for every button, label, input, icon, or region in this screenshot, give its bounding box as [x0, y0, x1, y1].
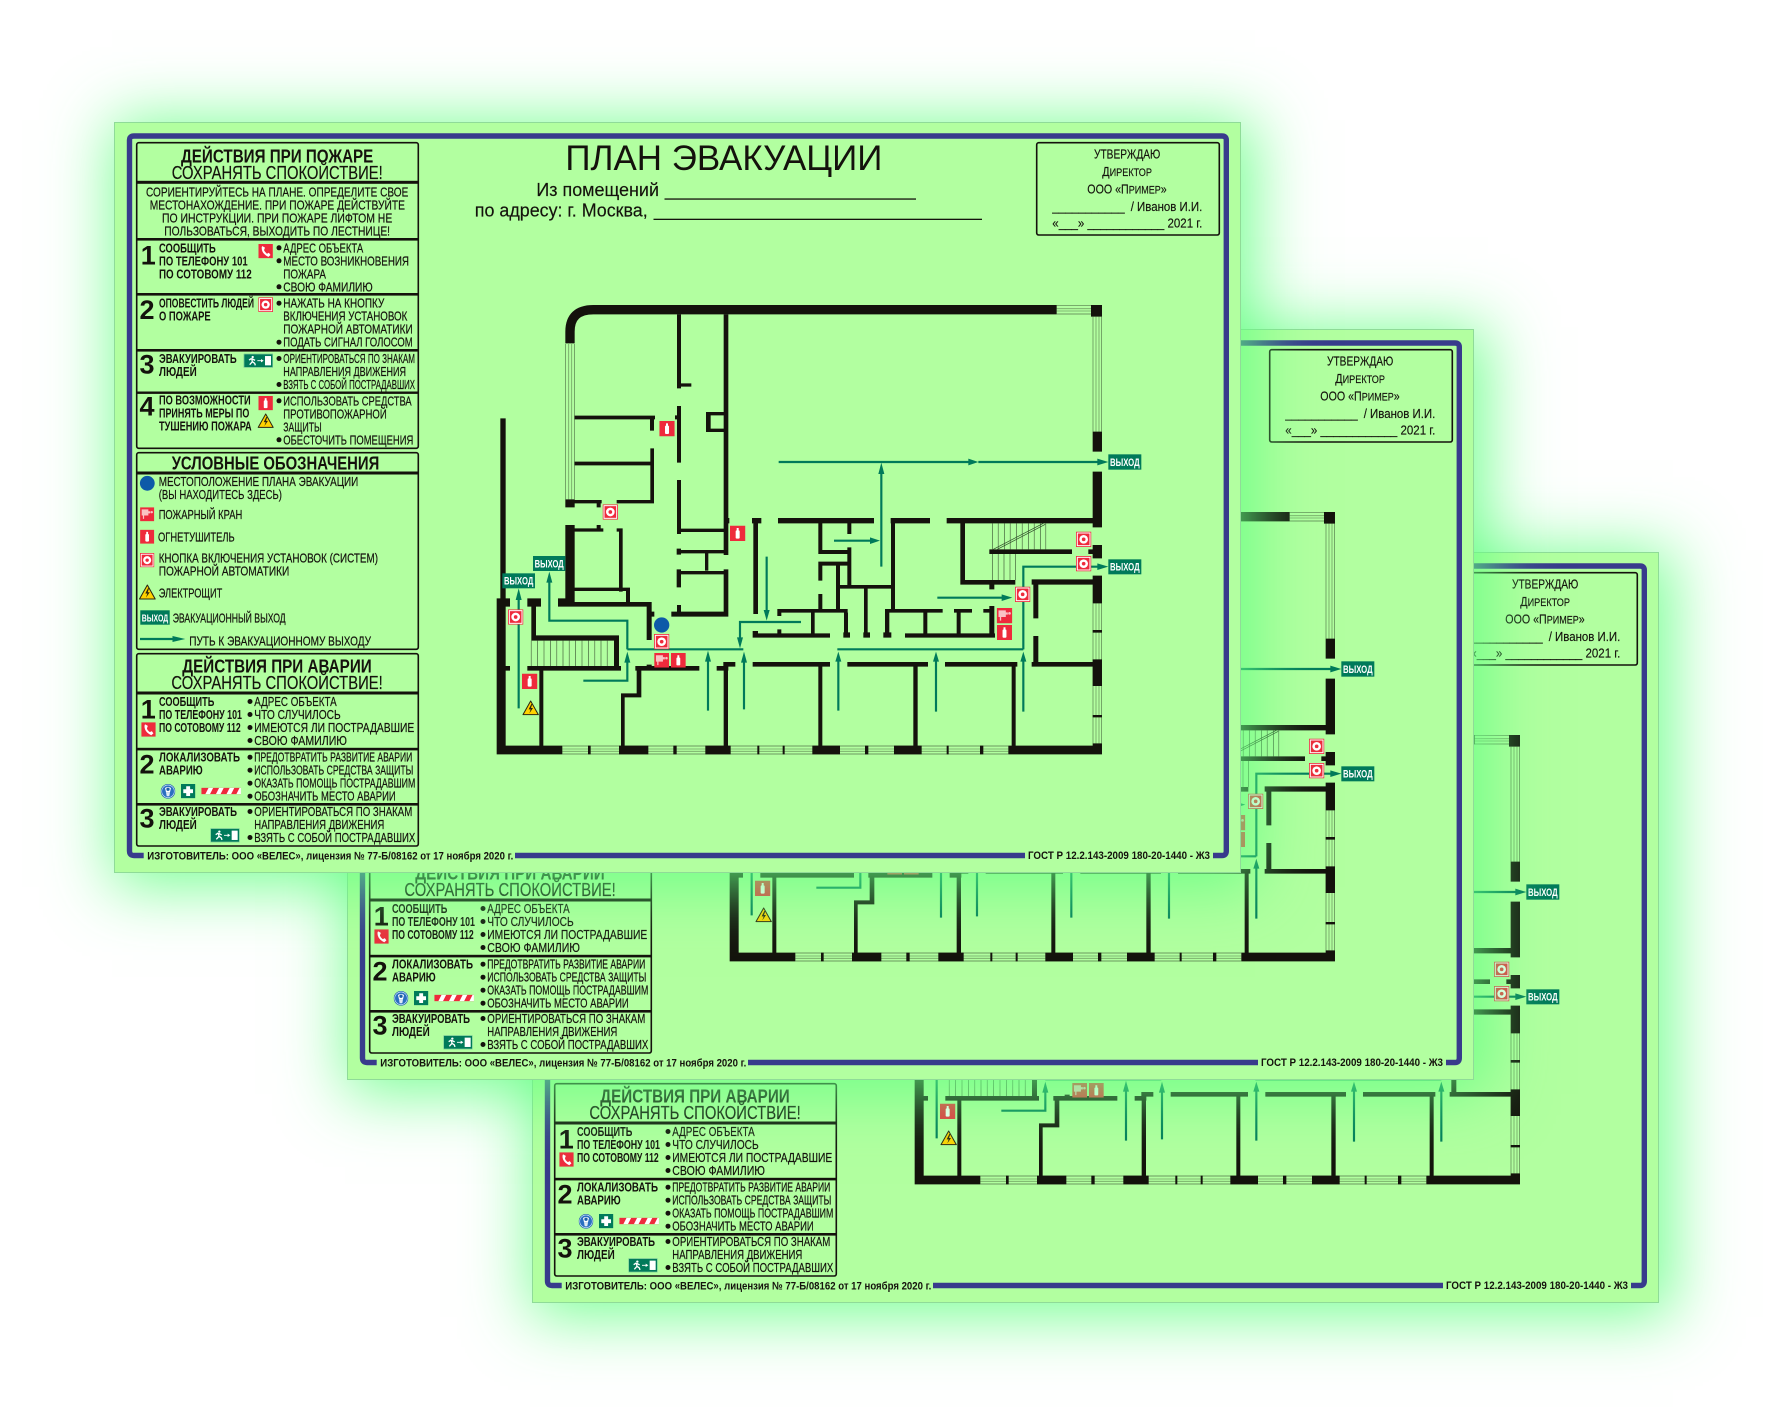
footer: manufacturer: ИЗГОТОВИТЕЛЬ: ООО «ВЕЛЕС», лицензия № 77-Б/08162 от 17 ноября 2020 г. — [147, 850, 513, 862]
evacuation floor plan: ВЫХОД — [1110, 562, 1140, 574]
footer: standard: ГОСТ Р 12.2.143-2009 180-20-1440 - Ж3 — [1446, 1280, 1628, 1292]
legend: electrical panel: ЭЛЕКТРОЩИТ — [159, 585, 222, 600]
evacuation floor plan: ВЫХОД — [1110, 457, 1140, 469]
panel: actions in an accident: НАПРАВЛЕНИЯ ДВИЖЕНИЯ — [672, 1247, 802, 1262]
approval box: ДИРЕКТОР — [1102, 164, 1152, 179]
footer: standard: ГОСТ Р 12.2.143-2009 180-20-1440 - Ж3 — [1261, 1057, 1443, 1069]
panel: actions in an accident: СООБЩИТЬ — [392, 901, 447, 916]
legend: evacuation exit: ВЫХОД — [142, 612, 169, 624]
panel: actions in an accident: СВОЮ ФАМИЛИЮ — [254, 733, 347, 748]
panel: actions in an accident: ПО СОТОВОМУ 112 — [392, 927, 474, 942]
evacuation floor plan: ВЫХОД — [1528, 887, 1558, 899]
evacuation floor plan — [730, 512, 1374, 961]
panel: actions in an accident — [555, 1084, 836, 1276]
panel: actions in an accident: ОРИЕНТИРОВАТЬСЯ ПО ЗНАКАМ — [254, 804, 412, 819]
approval box: «___» ____________ 2021 г. — [1470, 645, 1620, 660]
panel: actions in an accident: ВЗЯТЬ С СОБОЙ ПОСТРАДАВШИХ — [487, 1037, 649, 1052]
panel: actions in an accident — [137, 654, 418, 846]
panel: actions in an accident: СВОЮ ФАМИЛИЮ — [672, 1163, 765, 1178]
approval box — [1037, 143, 1219, 235]
panel: actions in an accident: ДЕЙСТВИЯ ПРИ АВАРИИ — [600, 1086, 790, 1107]
panel: actions in an accident: ИМЕЮТСЯ ЛИ ПОСТРАДАВШИЕ — [487, 927, 648, 942]
step 1: report: ПО СОТОВОМУ 112 — [159, 266, 252, 281]
panel: actions in an accident: АВАРИЮ — [159, 763, 203, 778]
step 1: report: АДРЕС ОБЪЕКТА — [283, 240, 364, 255]
panel: actions in an accident: НАПРАВЛЕНИЯ ДВИЖЕНИЯ — [487, 1024, 617, 1039]
panel: actions in an accident: ДЕЙСТВИЯ ПРИ АВАРИИ — [415, 863, 605, 884]
text block: orientation instructions: ПО ИНСТРУКЦИИ. ПРИ ПОЖАРЕ ЛИФТОМ НЕ — [162, 211, 393, 226]
panel: actions in an accident: ОКАЗАТЬ ПОМОЩЬ ПОСТРАДАВШИМ — [672, 1206, 833, 1221]
panel: actions in an accident: 2 — [140, 749, 155, 779]
step 4: firefighting: ПО ВОЗМОЖНОСТИ — [159, 393, 251, 408]
panel: actions in an accident: ОБОЗНАЧИТЬ МЕСТО АВАРИИ — [254, 789, 396, 804]
panel: actions in an accident: ЭВАКУИРОВАТЬ — [577, 1234, 655, 1249]
approval box: «___» ____________ 2021 г. — [1052, 215, 1202, 230]
legend: fire automation button — [140, 550, 378, 578]
panel: actions in an accident: ЛОКАЛИЗОВАТЬ — [392, 957, 473, 972]
panel: actions in an accident: ДЕЙСТВИЯ ПРИ АВАРИИ — [182, 656, 372, 677]
panel: actions in an accident: АДРЕС ОБЪЕКТА — [254, 694, 337, 709]
panel: actions in an accident: 2 — [372, 956, 388, 986]
subtitle: premises: Из помещений — [536, 180, 659, 200]
text block: orientation instructions: СОРИЕНТИРУЙТЕСЬ НА ПЛАНЕ. ОПРЕДЕЛИТЕ СВОЕ — [146, 185, 409, 200]
heading: actions in a fire: СОХРАНЯТЬ СПОКОЙСТВИЕ! — [172, 162, 383, 183]
approval box: ___________ — [1469, 629, 1543, 644]
evacuation floor plan: ВЫХОД — [1528, 992, 1558, 1004]
title: ПЛАН ЭВАКУАЦИИ — [565, 139, 882, 178]
step 4: firefighting: ИСПОЛЬЗОВАТЬ СРЕДСТВА — [283, 393, 412, 408]
evacuation floor plan: ВЫХОД — [737, 783, 766, 795]
approval box: ООО «ПРИМЕР» — [1320, 388, 1400, 403]
panel: actions in an accident: ОКАЗАТЬ ПОМОЩЬ ПОСТРАДАВШИМ — [254, 776, 415, 791]
panel: actions in an accident — [370, 861, 651, 1053]
panel: actions in an accident: СООБЩИТЬ — [577, 1124, 632, 1139]
step 3: evacuate people: ВЗЯТЬ С СОБОЙ ПОСТРАДАВШИХ — [283, 377, 415, 392]
approval box: УТВЕРЖДАЮ — [1327, 353, 1393, 368]
panel: actions in a fire — [137, 143, 418, 448]
legend: fire hydrant — [140, 507, 242, 522]
panel: third (rear) evacuation plan sheet — [532, 552, 1659, 1303]
legend: location: МЕСТОПОЛОЖЕНИЕ ПЛАНА ЭВАКУАЦИИ — [159, 474, 358, 489]
approval box: УТВЕРЖДАЮ — [1512, 576, 1578, 591]
legend: fire hydrant: ПОЖАРНЫЙ КРАН — [159, 507, 242, 522]
approval box: / Иванов И.И. — [1131, 199, 1202, 214]
approval box: ___________ — [1051, 199, 1125, 214]
panel: actions in an accident: ЛЮДЕЙ — [159, 817, 197, 832]
panel: actions in an accident: ЛЮДЕЙ — [392, 1024, 430, 1039]
legend: evacuation route arrow: ПУТЬ К ЭВАКУАЦИОННОМУ ВЫХОДУ — [189, 633, 372, 648]
footer: standard: ГОСТ Р 12.2.143-2009 180-20-1440 - Ж3 — [1028, 850, 1210, 862]
approval box: ООО «ПРИМЕР» — [1087, 181, 1167, 196]
step 2: alert people — [140, 295, 413, 350]
panel: actions in an accident: ВЗЯТЬ С СОБОЙ ПОСТРАДАВШИХ — [254, 830, 416, 845]
panel: actions in an accident: СОХРАНЯТЬ СПОКОЙСТВИЕ! — [171, 672, 383, 693]
approval box: / Иванов И.И. — [1549, 629, 1620, 644]
step 3: evacuate people: 3 — [140, 349, 155, 379]
step 1: report: 1 — [141, 240, 156, 270]
panel: actions in an accident: ЛОКАЛИЗОВАТЬ — [577, 1180, 658, 1195]
panel: actions in an accident: ПРЕДОТВРАТИТЬ РАЗВИТИЕ АВАРИИ — [487, 957, 645, 972]
step 2: alert people: ВКЛЮЧЕНИЯ УСТАНОВОК — [283, 309, 408, 324]
panel: actions in an accident: ЭВАКУИРОВАТЬ — [159, 804, 237, 819]
legend: location — [140, 474, 358, 502]
panel: actions in an accident: ПРЕДОТВРАТИТЬ РАЗВИТИЕ АВАРИИ — [254, 750, 412, 765]
step 4: firefighting: ОБЕСТОЧИТЬ ПОМЕЩЕНИЯ — [283, 432, 413, 447]
panel: actions in an accident: 1 — [141, 694, 156, 724]
step 1: report: ПО ТЕЛЕФОНУ 101 — [159, 253, 248, 268]
evacuation floor plan: ВЫХОД — [922, 1006, 951, 1018]
panel: actions in an accident: ВЗЯТЬ С СОБОЙ ПОСТРАДАВШИХ — [672, 1260, 834, 1275]
step 2: alert people: ОПОВЕСТИТЬ ЛЮДЕЙ — [159, 296, 254, 311]
panel: actions in an accident: СОХРАНЯТЬ СПОКОЙСТВИЕ! — [589, 1102, 801, 1123]
text block: orientation instructions: ПОЛЬЗОВАТЬСЯ, ВЫХОДИТЬ ПО ЛЕСТНИЦЕ! — [164, 224, 390, 239]
step 4: firefighting: ТУШЕНИЮ ПОЖАРА — [159, 419, 252, 434]
panel: actions in an accident: НАПРАВЛЕНИЯ ДВИЖЕНИЯ — [254, 817, 384, 832]
step 3: evacuate people: НАПРАВЛЕНИЯ ДВИЖЕНИЯ — [283, 364, 406, 379]
step 3: evacuate people — [140, 349, 415, 392]
step 1: report: ПОЖАРА — [283, 266, 326, 281]
panel: actions in an accident: 1 — [374, 902, 389, 932]
step 1: report: СООБЩИТЬ — [159, 240, 216, 255]
panel: actions in an accident: 3 — [140, 804, 155, 834]
subtitle: address: по адресу: г. Москва, — [475, 201, 648, 221]
approval box: УТВЕРЖДАЮ — [1094, 146, 1160, 161]
step 2: alert people: ПОДАТЬ СИГНАЛ ГОЛОСОМ — [283, 335, 413, 350]
step 3: evacuate people: ЭВАКУИРОВАТЬ — [159, 351, 237, 366]
step 4: firefighting: 4 — [140, 392, 155, 422]
panel: actions in an accident: ЧТО СЛУЧИЛОСЬ — [672, 1137, 759, 1152]
panel: actions in an accident: ИСПОЛЬЗОВАТЬ СРЕДСТВА ЗАЩИТЫ — [487, 970, 646, 985]
panel: actions in an accident: АДРЕС ОБЪЕКТА — [672, 1124, 755, 1139]
panel: actions in an accident: СОХРАНЯТЬ СПОКОЙСТВИЕ! — [404, 879, 616, 900]
step 2: alert people: 2 — [140, 295, 155, 325]
footer: manufacturer: ИЗГОТОВИТЕЛЬ: ООО «ВЕЛЕС», лицензия № 77-Б/08162 от 17 ноября 2020 г. — [380, 1057, 746, 1069]
panel: actions in an accident: ЧТО СЛУЧИЛОСЬ — [487, 914, 574, 929]
panel: actions in an accident: 3 — [558, 1234, 573, 1264]
evacuation floor plan: ВЫХОД — [535, 558, 564, 570]
legend: fire automation button: ПОЖАРНОЙ АВТОМАТИКИ — [159, 563, 289, 578]
blue frame — [130, 136, 1226, 856]
panel: actions in an accident: ЛОКАЛИЗОВАТЬ — [159, 750, 240, 765]
panel: actions in an accident: АВАРИЮ — [577, 1193, 621, 1208]
legend: extinguisher — [140, 530, 235, 545]
panel: actions in an accident: ОКАЗАТЬ ПОМОЩЬ ПОСТРАДАВШИМ — [487, 983, 648, 998]
panel: actions in an accident: 3 — [372, 1011, 388, 1041]
legend: electrical panel — [140, 585, 222, 600]
heading: actions in a fire: ДЕЙСТВИЯ ПРИ ПОЖАРЕ — [181, 145, 373, 166]
heading: actions in a fire — [172, 145, 383, 183]
step 1: report — [141, 240, 409, 294]
panel: actions in an accident: 1 — [559, 1124, 574, 1154]
evacuation floor plan: ВЫХОД — [1343, 664, 1373, 676]
step 1: report: МЕСТО ВОЗНИКНОВЕНИЯ — [283, 253, 409, 268]
blue frame — [548, 566, 1644, 1286]
legend: fire automation button: КНОПКА ВКЛЮЧЕНИЯ УСТАНОВОК (СИСТЕМ) — [159, 550, 378, 565]
panel: actions in an accident: АВАРИЮ — [392, 970, 436, 985]
panel: actions in an accident: ИСПОЛЬЗОВАТЬ СРЕДСТВА ЗАЩИТЫ — [254, 763, 413, 778]
panel: actions in an accident: 2 — [558, 1179, 573, 1209]
panel: legend — [137, 453, 418, 649]
legend: evacuation route arrow — [140, 633, 372, 648]
approval box: ДИРЕКТОР — [1520, 594, 1570, 609]
panel: actions in an accident: ОРИЕНТИРОВАТЬСЯ ПО ЗНАКАМ — [487, 1011, 645, 1026]
panel: actions in an accident: ЭВАКУИРОВАТЬ — [392, 1011, 470, 1026]
evacuation floor plan — [497, 305, 1141, 754]
panel: actions in an accident: СВОЮ ФАМИЛИЮ — [487, 940, 580, 955]
panel: actions in an accident: ИСПОЛЬЗОВАТЬ СРЕДСТВА ЗАЩИТЫ — [672, 1193, 831, 1208]
evacuation floor plan: ВЫХОД — [768, 765, 797, 777]
panel: actions in an accident: ОРИЕНТИРОВАТЬСЯ ПО ЗНАКАМ — [672, 1234, 830, 1249]
step 3: evacuate people: ОРИЕНТИРОВАТЬСЯ ПО ЗНАКАМ — [283, 351, 415, 366]
panel: front evacuation plan sheet — [114, 122, 1241, 873]
step 4: firefighting: ПРОТИВОПОЖАРНОЙ — [283, 406, 387, 421]
step 3: evacuate people: ЛЮДЕЙ — [159, 364, 197, 379]
approval box: «___» ____________ 2021 г. — [1285, 422, 1435, 437]
step 1: report: СВОЮ ФАМИЛИЮ — [283, 279, 373, 294]
legend: evacuation exit — [140, 610, 286, 626]
approval box: ДИРЕКТОР — [1335, 371, 1385, 386]
approval box: / Иванов И.И. — [1364, 406, 1435, 421]
panel: actions in an accident: ОБОЗНАЧИТЬ МЕСТО АВАРИИ — [672, 1219, 814, 1234]
panel: actions in an accident: ИМЕЮТСЯ ЛИ ПОСТРАДАВШИЕ — [672, 1150, 833, 1165]
panel: actions in an accident: ОБОЗНАЧИТЬ МЕСТО АВАРИИ — [487, 996, 629, 1011]
blue frame — [362, 343, 1459, 1062]
panel: actions in an accident: ПО СОТОВОМУ 112 — [159, 720, 241, 735]
step 2: alert people: НАЖАТЬ НА КНОПКУ — [283, 296, 385, 311]
evacuation floor plan: ВЫХОД — [953, 988, 982, 1000]
heading: legend: УСЛОВНЫЕ ОБОЗНАЧЕНИЯ — [172, 453, 379, 473]
panel: actions in an accident: ПО ТЕЛЕФОНУ 101 — [392, 914, 475, 929]
panel: second (middle) evacuation plan sheet — [347, 329, 1474, 1080]
step 2: alert people: ПОЖАРНОЙ АВТОМАТИКИ — [283, 322, 413, 337]
panel: actions in an accident: ПО СОТОВОМУ 112 — [577, 1150, 659, 1165]
panel: actions in an accident: СООБЩИТЬ — [159, 694, 214, 709]
step 4: firefighting: ЗАЩИТЫ — [283, 419, 322, 434]
legend: location: (ВЫ НАХОДИТЕСЬ ЗДЕСЬ) — [159, 487, 282, 502]
step 2: alert people: О ПОЖАРЕ — [159, 309, 211, 324]
footer: manufacturer: ИЗГОТОВИТЕЛЬ: ООО «ВЕЛЕС», лицензия № 77-Б/08162 от 17 ноября 2020 г. — [565, 1280, 931, 1292]
approval box: ООО «ПРИМЕР» — [1505, 611, 1585, 626]
panel: actions in an accident: ИМЕЮТСЯ ЛИ ПОСТРАДАВШИЕ — [254, 720, 415, 735]
step 4: firefighting: ПРИНЯТЬ МЕРЫ ПО — [159, 406, 249, 421]
approval box: ___________ — [1284, 406, 1358, 421]
evacuation floor plan: ВЫХОД — [504, 576, 533, 588]
approval box — [1455, 573, 1637, 665]
legend: extinguisher: ОГНЕТУШИТЕЛЬ — [158, 530, 235, 545]
panel: actions in an accident: ПРЕДОТВРАТИТЬ РАЗВИТИЕ АВАРИИ — [672, 1180, 830, 1195]
legend: evacuation exit: ЭВАКУАЦИОННЫЙ ВЫХОД — [173, 611, 286, 626]
text block: orientation instructions: МЕСТОНАХОЖДЕНИЕ. ПРИ ПОЖАРЕ ДЕЙСТВУЙТЕ — [150, 198, 405, 213]
panel: actions in an accident: ПО ТЕЛЕФОНУ 101 — [159, 707, 242, 722]
evacuation floor plan — [915, 735, 1559, 1184]
evacuation floor plan: ВЫХОД — [1343, 769, 1373, 781]
approval box — [1270, 350, 1452, 442]
panel: actions in an accident: ЛЮДЕЙ — [577, 1247, 615, 1262]
panel: actions in an accident: ЧТО СЛУЧИЛОСЬ — [254, 707, 341, 722]
panel: actions in an accident: ПО ТЕЛЕФОНУ 101 — [577, 1137, 660, 1152]
step 4: firefighting — [140, 392, 413, 447]
panel: actions in an accident: АДРЕС ОБЪЕКТА — [487, 901, 570, 916]
text block: orientation instructions — [146, 185, 409, 239]
